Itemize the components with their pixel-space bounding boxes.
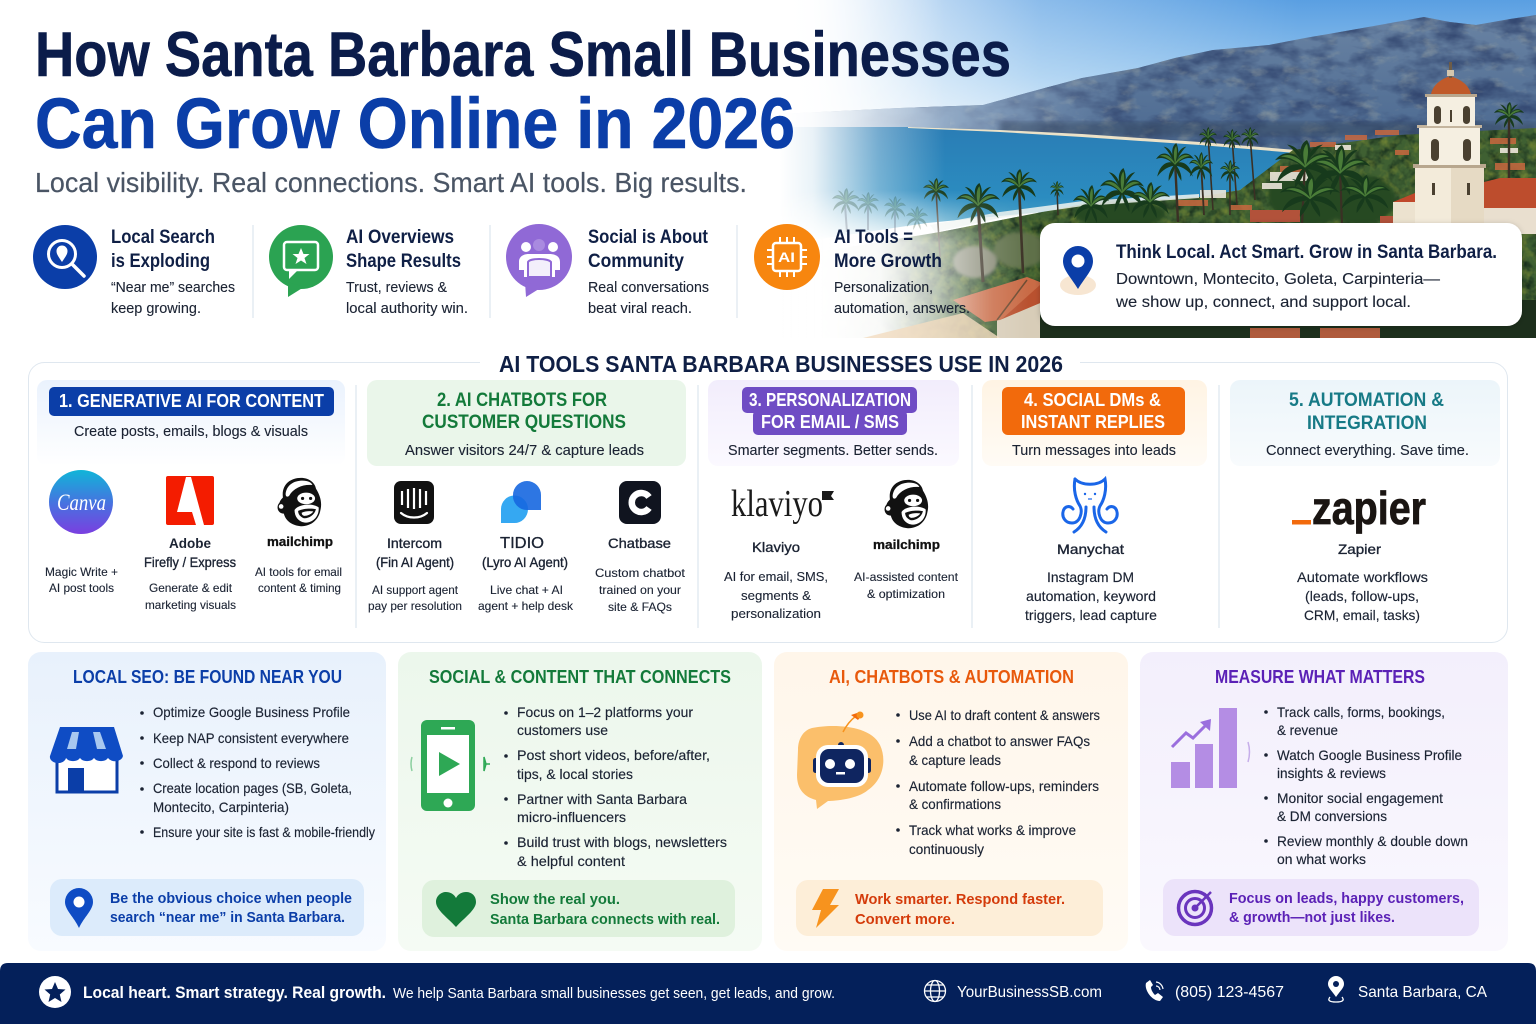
panel: measure what matters (1140, 652, 1508, 951)
callout: Focus on leads, happy customers, (1229, 890, 1464, 907)
tool: Zapier: Zapier (1338, 541, 1381, 557)
tool: Mailchimp: AI-assisted content (854, 570, 959, 584)
tool: Mailchimp: & optimization (867, 587, 945, 601)
panel: social and content (398, 652, 762, 951)
column 2: chatbots: 2. AI CHATBOTS FOR (437, 390, 607, 411)
tool: Zapier: Automate workflows (1297, 569, 1428, 585)
column 2: chatbots (367, 380, 686, 614)
bullet list: Post short videos, before/after, (517, 747, 710, 763)
badge heading (742, 387, 917, 435)
feature: social community (506, 224, 709, 317)
bullet list: Use AI to draft content & answers (909, 707, 1100, 723)
tool: Intercom (368, 481, 462, 613)
bullet list (140, 704, 375, 840)
tool: Adobe: Firefly / Express (144, 554, 236, 570)
palm trees (923, 102, 1524, 282)
bullet list: Build trust with blogs, newsletters (517, 834, 727, 850)
tool: Intercom: AI support agent (372, 583, 459, 597)
column 4: social DMs: Turn messages into leads (1012, 442, 1176, 459)
badge heading: INSTANT REPLIES (1021, 411, 1165, 432)
heading: MEASURE WHAT MATTERS (1215, 667, 1425, 687)
badge heading: 4. SOCIAL DMs & (1024, 389, 1161, 410)
tool: Chatbase: site & FAQs (608, 600, 672, 614)
bullet list: Add a chatbot to answer FAQs (909, 733, 1090, 749)
tool: Tidio: agent + help desk (478, 599, 574, 613)
feature: local search: keep growing. (111, 300, 201, 317)
column 5: automation: INTEGRATION (1307, 413, 1427, 434)
feature: AI overviews: Shape Results (346, 251, 461, 272)
icon: robot in bubble (797, 712, 883, 809)
heading: AI, CHATBOTS & AUTOMATION (829, 667, 1074, 687)
icon: growth chart (1171, 708, 1250, 788)
red roof building (953, 277, 1040, 338)
feature: AI overviews: local authority win. (346, 300, 468, 317)
tool: Mailchimp (255, 478, 342, 595)
feature: social community: Real conversations (588, 279, 709, 296)
feature: AI tools: automation, answers. (834, 300, 970, 317)
bullet list: Review monthly & double down (1277, 833, 1468, 849)
column 3: personalization (708, 380, 959, 621)
title (35, 20, 1011, 164)
feature: social community: Social is About (588, 227, 709, 248)
icon: orange chip: AI (778, 249, 795, 265)
icon: green speech bubble with star (269, 225, 333, 297)
bullet list: & revenue (1277, 722, 1338, 738)
bullet list: Optimize Google Business Profile (153, 704, 350, 720)
callout: think local: we show up, connect, and support local. (1115, 294, 1411, 311)
feature: AI tools (754, 224, 970, 317)
bullet list (896, 707, 1100, 857)
tool: Adobe: Adobe (169, 535, 211, 551)
subtitle: Local visibility. Real connections. Smart AI tools. Big results. (35, 167, 747, 198)
feature: AI tools: Personalization, (834, 279, 933, 296)
bullet list: & helpful content (517, 853, 625, 869)
callout: & growth—not just likes. (1229, 909, 1395, 926)
tool: Tidio: TIDIO (500, 535, 544, 552)
feature: local search: is Exploding (111, 251, 210, 272)
column 5: automation (1230, 380, 1500, 623)
callout (1163, 879, 1479, 936)
bullet list: Montecito, Carpinteria) (153, 799, 289, 815)
column 5: automation: Connect everything. Save time. (1266, 442, 1469, 459)
feature: AI overviews: AI Overviews (346, 227, 454, 248)
callout: Santa Barbara connects with real. (490, 911, 720, 928)
heading: SOCIAL & CONTENT THAT CONNECTS (429, 667, 731, 687)
tool: Mailchimp: AI tools for email (255, 565, 342, 579)
bullet list: Track what works & improve (909, 822, 1076, 838)
tool: Klaviyo: personalization (731, 606, 821, 621)
callout (422, 880, 735, 937)
bullet list: & capture leads (909, 752, 1001, 768)
bullet list: & confirmations (909, 796, 1001, 812)
tool: Tidio: (Lyro AI Agent) (482, 554, 568, 570)
location: Santa Barbara, CA (1358, 984, 1487, 1001)
icon: orange chip (754, 224, 820, 290)
feature: social community: Community (588, 251, 684, 272)
footer bar (0, 963, 1536, 1024)
heading: LOCAL SEO: BE FOUND NEAR YOU (73, 667, 342, 687)
icon: purple bubble with people (506, 224, 572, 297)
callout: Be the obvious choice when people (110, 890, 352, 907)
tool: Klaviyo: segments & (741, 588, 811, 603)
tool: Klaviyo (724, 483, 834, 621)
website (924, 980, 1102, 1002)
panel: AI chatbots automation (774, 652, 1128, 951)
column 3: personalization: Smarter segments. Better sends. (728, 442, 938, 459)
tool: Mailchimp (854, 480, 959, 601)
bullet list: continuously (909, 841, 984, 857)
icon: magnifier with pin (33, 225, 97, 289)
icon: phone with play (411, 720, 490, 811)
tool: Chatbase (595, 481, 686, 614)
tool: Mailchimp: mailchimp (267, 534, 333, 549)
badge heading (1002, 387, 1185, 435)
tool: Chatbase: trained on your (599, 583, 681, 597)
column 1: generative AI (37, 380, 345, 612)
tool: Zapier: CRM, email, tasks) (1304, 607, 1420, 623)
badge heading: 3. PERSONALIZATION (749, 389, 911, 410)
bullet list: Monitor social engagement (1277, 790, 1443, 806)
bullet list: customers use (517, 722, 608, 738)
column 1: generative AI: Create posts, emails, blogs & visuals (74, 423, 308, 440)
tool: Zapier (1292, 482, 1428, 623)
callout: Work smarter. Respond faster. (855, 891, 1065, 908)
faded palms (832, 188, 928, 232)
tool: Adobe (144, 476, 236, 612)
bullet list (504, 704, 727, 869)
tool: Intercom: (Fin AI Agent) (376, 554, 454, 570)
callout: think local (1040, 223, 1522, 326)
badge heading (49, 387, 334, 416)
tool: Adobe: Generate & edit (149, 581, 233, 595)
tool: Chatbase: Custom chatbot (595, 566, 686, 580)
bullet list: Watch Google Business Profile (1277, 747, 1462, 763)
tool: Klaviyo: klaviyo (731, 483, 823, 525)
tool: Manychat (1025, 479, 1157, 623)
tool: Intercom: Intercom (387, 535, 442, 551)
bullet list: micro-influencers (517, 809, 626, 825)
panel: local SEO (28, 652, 386, 951)
tool: Klaviyo: AI for email, SMS, (724, 569, 828, 584)
tool: Adobe: marketing visuals (145, 598, 236, 612)
callout: Convert more. (855, 911, 955, 928)
website: YourBusinessSB.com (957, 984, 1102, 1001)
callout: think local: Think Local. Act Smart. Grow in Santa Barbara. (1116, 242, 1497, 263)
callout: think local: Downtown, Montecito, Goleta, Carpinteria— (1116, 271, 1440, 288)
bullet list: Track calls, forms, bookings, (1277, 704, 1445, 720)
feature: social community: beat viral reach. (588, 300, 692, 317)
bullet list: Focus on 1–2 platforms your (517, 704, 693, 720)
bullet list: Ensure your site is fast & mobile-friendly (153, 824, 375, 840)
bullet list: on what works (1277, 851, 1366, 867)
tagline: We help Santa Barbara small businesses get seen, get leads, and grow. (393, 986, 835, 1002)
tool: Manychat: triggers, lead capture (1025, 607, 1157, 623)
badge heading: FOR EMAIL / SMS (761, 411, 899, 432)
title: Can Grow Online in 2026 (35, 85, 795, 164)
badge heading: 1. GENERATIVE AI FOR CONTENT (59, 390, 325, 411)
bullet list (1264, 704, 1468, 867)
bullet list: Collect & respond to reviews (153, 755, 320, 771)
feature: local search: Local Search (111, 227, 215, 248)
icon: star badge (39, 976, 71, 1008)
feature: local search (33, 225, 235, 317)
tool: Zapier: (leads, follow-ups, (1305, 588, 1419, 604)
column 2: chatbots: Answer visitors 24/7 & capture leads (405, 442, 644, 459)
hero photo: Santa Barbara coast (780, 0, 1536, 340)
town buildings (1178, 130, 1525, 224)
callout (50, 879, 364, 936)
tool: Canva (45, 470, 118, 595)
left fade of photo (780, 0, 945, 338)
tool: Tidio (478, 481, 574, 613)
phone: (805) 123-4567 (1175, 984, 1284, 1001)
tool: Zapier: zapier (1312, 482, 1426, 534)
icon: map pin (1060, 246, 1096, 295)
bullet list: Automate follow-ups, reminders (909, 778, 1099, 794)
bullet list: & DM conversions (1277, 808, 1387, 824)
tool: Canva: AI post tools (49, 581, 114, 595)
tool: Manychat: Manychat (1057, 541, 1124, 557)
column 4: social DMs (982, 380, 1207, 623)
heading: AI TOOLS SANTA BARBARA BUSINESSES USE IN 2026 (499, 351, 1063, 377)
tool: Canva: Magic Write + (45, 565, 118, 579)
bullet list: insights & reviews (1277, 765, 1386, 781)
callout: Show the real you. (490, 891, 620, 908)
callout: search “near me” in Santa Barbara. (110, 909, 345, 926)
tool: Klaviyo: Klaviyo (752, 539, 800, 555)
panel: AI tools (28, 351, 1508, 642)
tool: Canva: Canva (57, 490, 106, 515)
column 2: chatbots: CUSTOMER QUESTIONS (422, 412, 626, 433)
tagline: Local heart. Smart strategy. Real growth. (83, 984, 386, 1002)
callout (796, 880, 1103, 936)
feature: AI tools: AI Tools = (834, 227, 913, 248)
feature: local search: “Near me” searches (111, 279, 235, 296)
title: How Santa Barbara Small Businesses (35, 20, 1011, 90)
tool: Manychat: automation, keyword (1026, 588, 1156, 604)
bullet list: Create location pages (SB, Goleta, (153, 780, 352, 796)
tool: Tidio: Live chat + AI (490, 583, 563, 597)
tool: Mailchimp: mailchimp (873, 537, 940, 552)
phone (1146, 980, 1284, 1001)
bullet list: Keep NAP consistent everywhere (153, 730, 349, 746)
tool: Chatbase: Chatbase (608, 535, 671, 551)
tagline (83, 984, 835, 1002)
tool: Manychat: Instagram DM (1047, 569, 1134, 585)
bullet list: Partner with Santa Barbara (517, 791, 687, 807)
bell tower (1393, 62, 1536, 234)
tool: Intercom: pay per resolution (368, 599, 462, 613)
feature: AI overviews (269, 225, 468, 317)
icon: storefront (50, 727, 123, 792)
feature: AI tools: More Growth (834, 251, 942, 272)
tool: Mailchimp: content & timing (258, 581, 341, 595)
location (1328, 976, 1487, 1002)
bullet list: tips, & local stories (517, 766, 633, 782)
column 5: automation: 5. AUTOMATION & (1289, 390, 1444, 411)
feature: AI overviews: Trust, reviews & (346, 279, 447, 296)
